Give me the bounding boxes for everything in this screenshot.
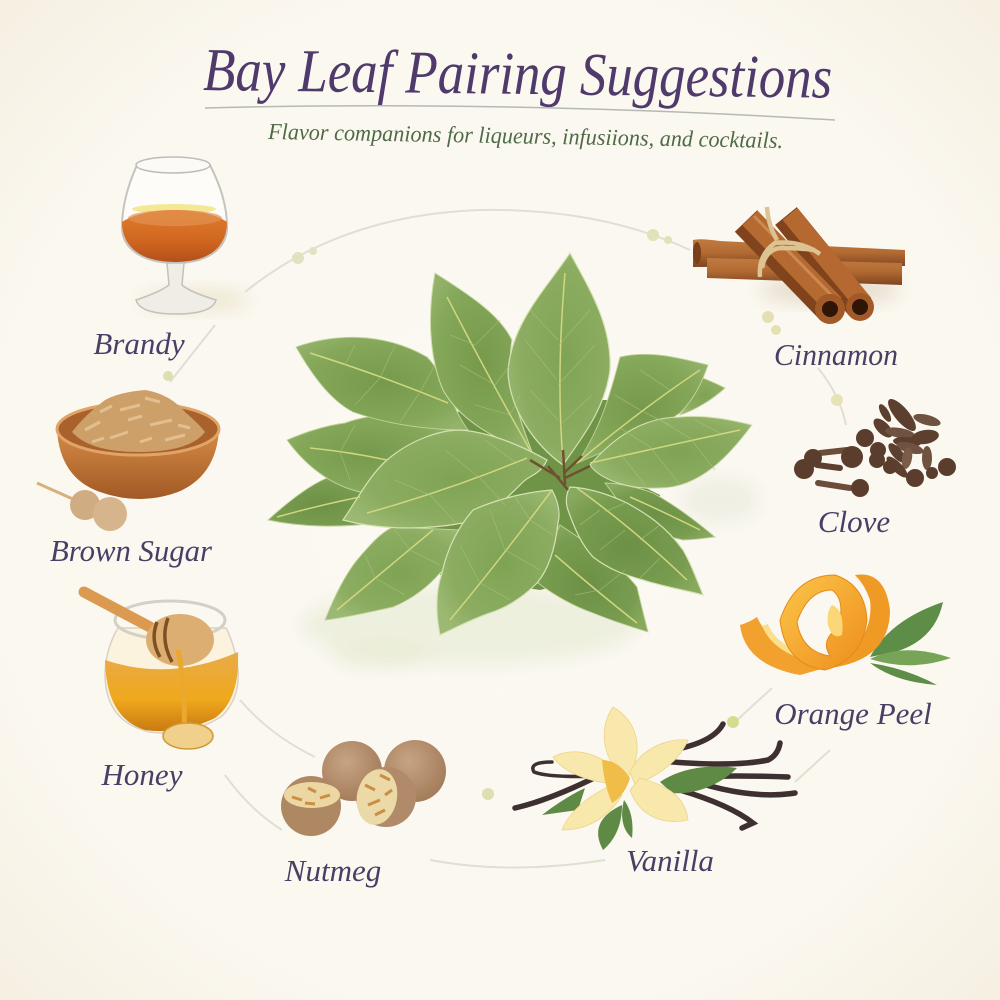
leaf midrib veins [277,273,740,623]
honey dipper [84,592,214,666]
bowl rim [57,403,219,455]
label: orange peel: Orange Peel [774,696,932,731]
clove buds [794,429,956,497]
horizontal sticks [693,239,905,285]
stem and foot [136,263,216,314]
right leaf [590,416,752,488]
cut nutmeg left [281,776,341,836]
back leaves [268,337,725,632]
brandy reflection [132,204,216,214]
title underline [205,106,835,120]
ingredient: brandy [122,157,250,314]
connector ring [163,210,846,868]
title: Bay Leaf Pairing Suggestions [203,37,833,112]
honey fill [105,652,238,731]
sugar texture [85,398,190,442]
jar rim [115,601,225,639]
label: nutmeg: Nutmeg [284,853,381,888]
glass bowl [122,165,227,263]
ingredient: brown sugar [37,390,219,531]
ingredient: honey [84,592,238,749]
leaf wash shadow [300,476,760,669]
front left leaf [343,430,547,528]
leaf stems [530,450,590,490]
glass shadow [140,288,250,312]
jar body [105,628,238,733]
peel spiral back [830,574,890,668]
upper left leaf [430,273,532,452]
label: honey: Honey [101,757,183,792]
honey drip and spoon [163,650,213,749]
lower right leaf [566,487,703,595]
glass rim [136,157,210,173]
ingredient: nutmeg [281,740,446,836]
flower throat [602,760,630,803]
sugar spoon and clumps [37,483,127,531]
ingredient: clove [794,395,956,497]
cut nutmeg front [352,766,416,828]
diagonal sticks [746,214,874,324]
vanilla flower petals [553,707,688,830]
clove stems and seeds [817,395,942,488]
lower center leaf [437,490,559,635]
bowl [57,430,219,499]
peel inner curl [828,605,843,636]
whole nutmeg top [322,741,382,801]
vanilla leaves [542,767,737,850]
liquid highlights [128,210,222,226]
ingredient: cinnamon [693,207,905,324]
peel leaves [870,602,951,685]
label: clove: Clove [818,504,890,539]
stick shadow [760,276,900,304]
whole nutmeg right [384,740,446,802]
brandy liquid [122,210,227,262]
subtitle: Flavor companions for liqueurs, infusiions, and cocktails. [267,119,783,153]
peel outer tail [740,617,825,675]
label: brown sugar: Brown Sugar [50,533,213,568]
label: brandy: Brandy [93,326,185,361]
top leaf [508,253,610,465]
peel spiral front [780,575,867,670]
sugar mound [72,390,205,452]
central bay leaf cluster [268,253,760,669]
ingredient: orange peel [740,574,951,685]
twine [760,207,820,277]
leaf body underlay [385,370,660,590]
label: vanilla: Vanilla [626,843,714,878]
vanilla pods [515,724,795,828]
leaf side veins [340,310,720,600]
ingredient: vanilla [515,707,795,850]
label: cinnamon: Cinnamon [774,337,898,372]
